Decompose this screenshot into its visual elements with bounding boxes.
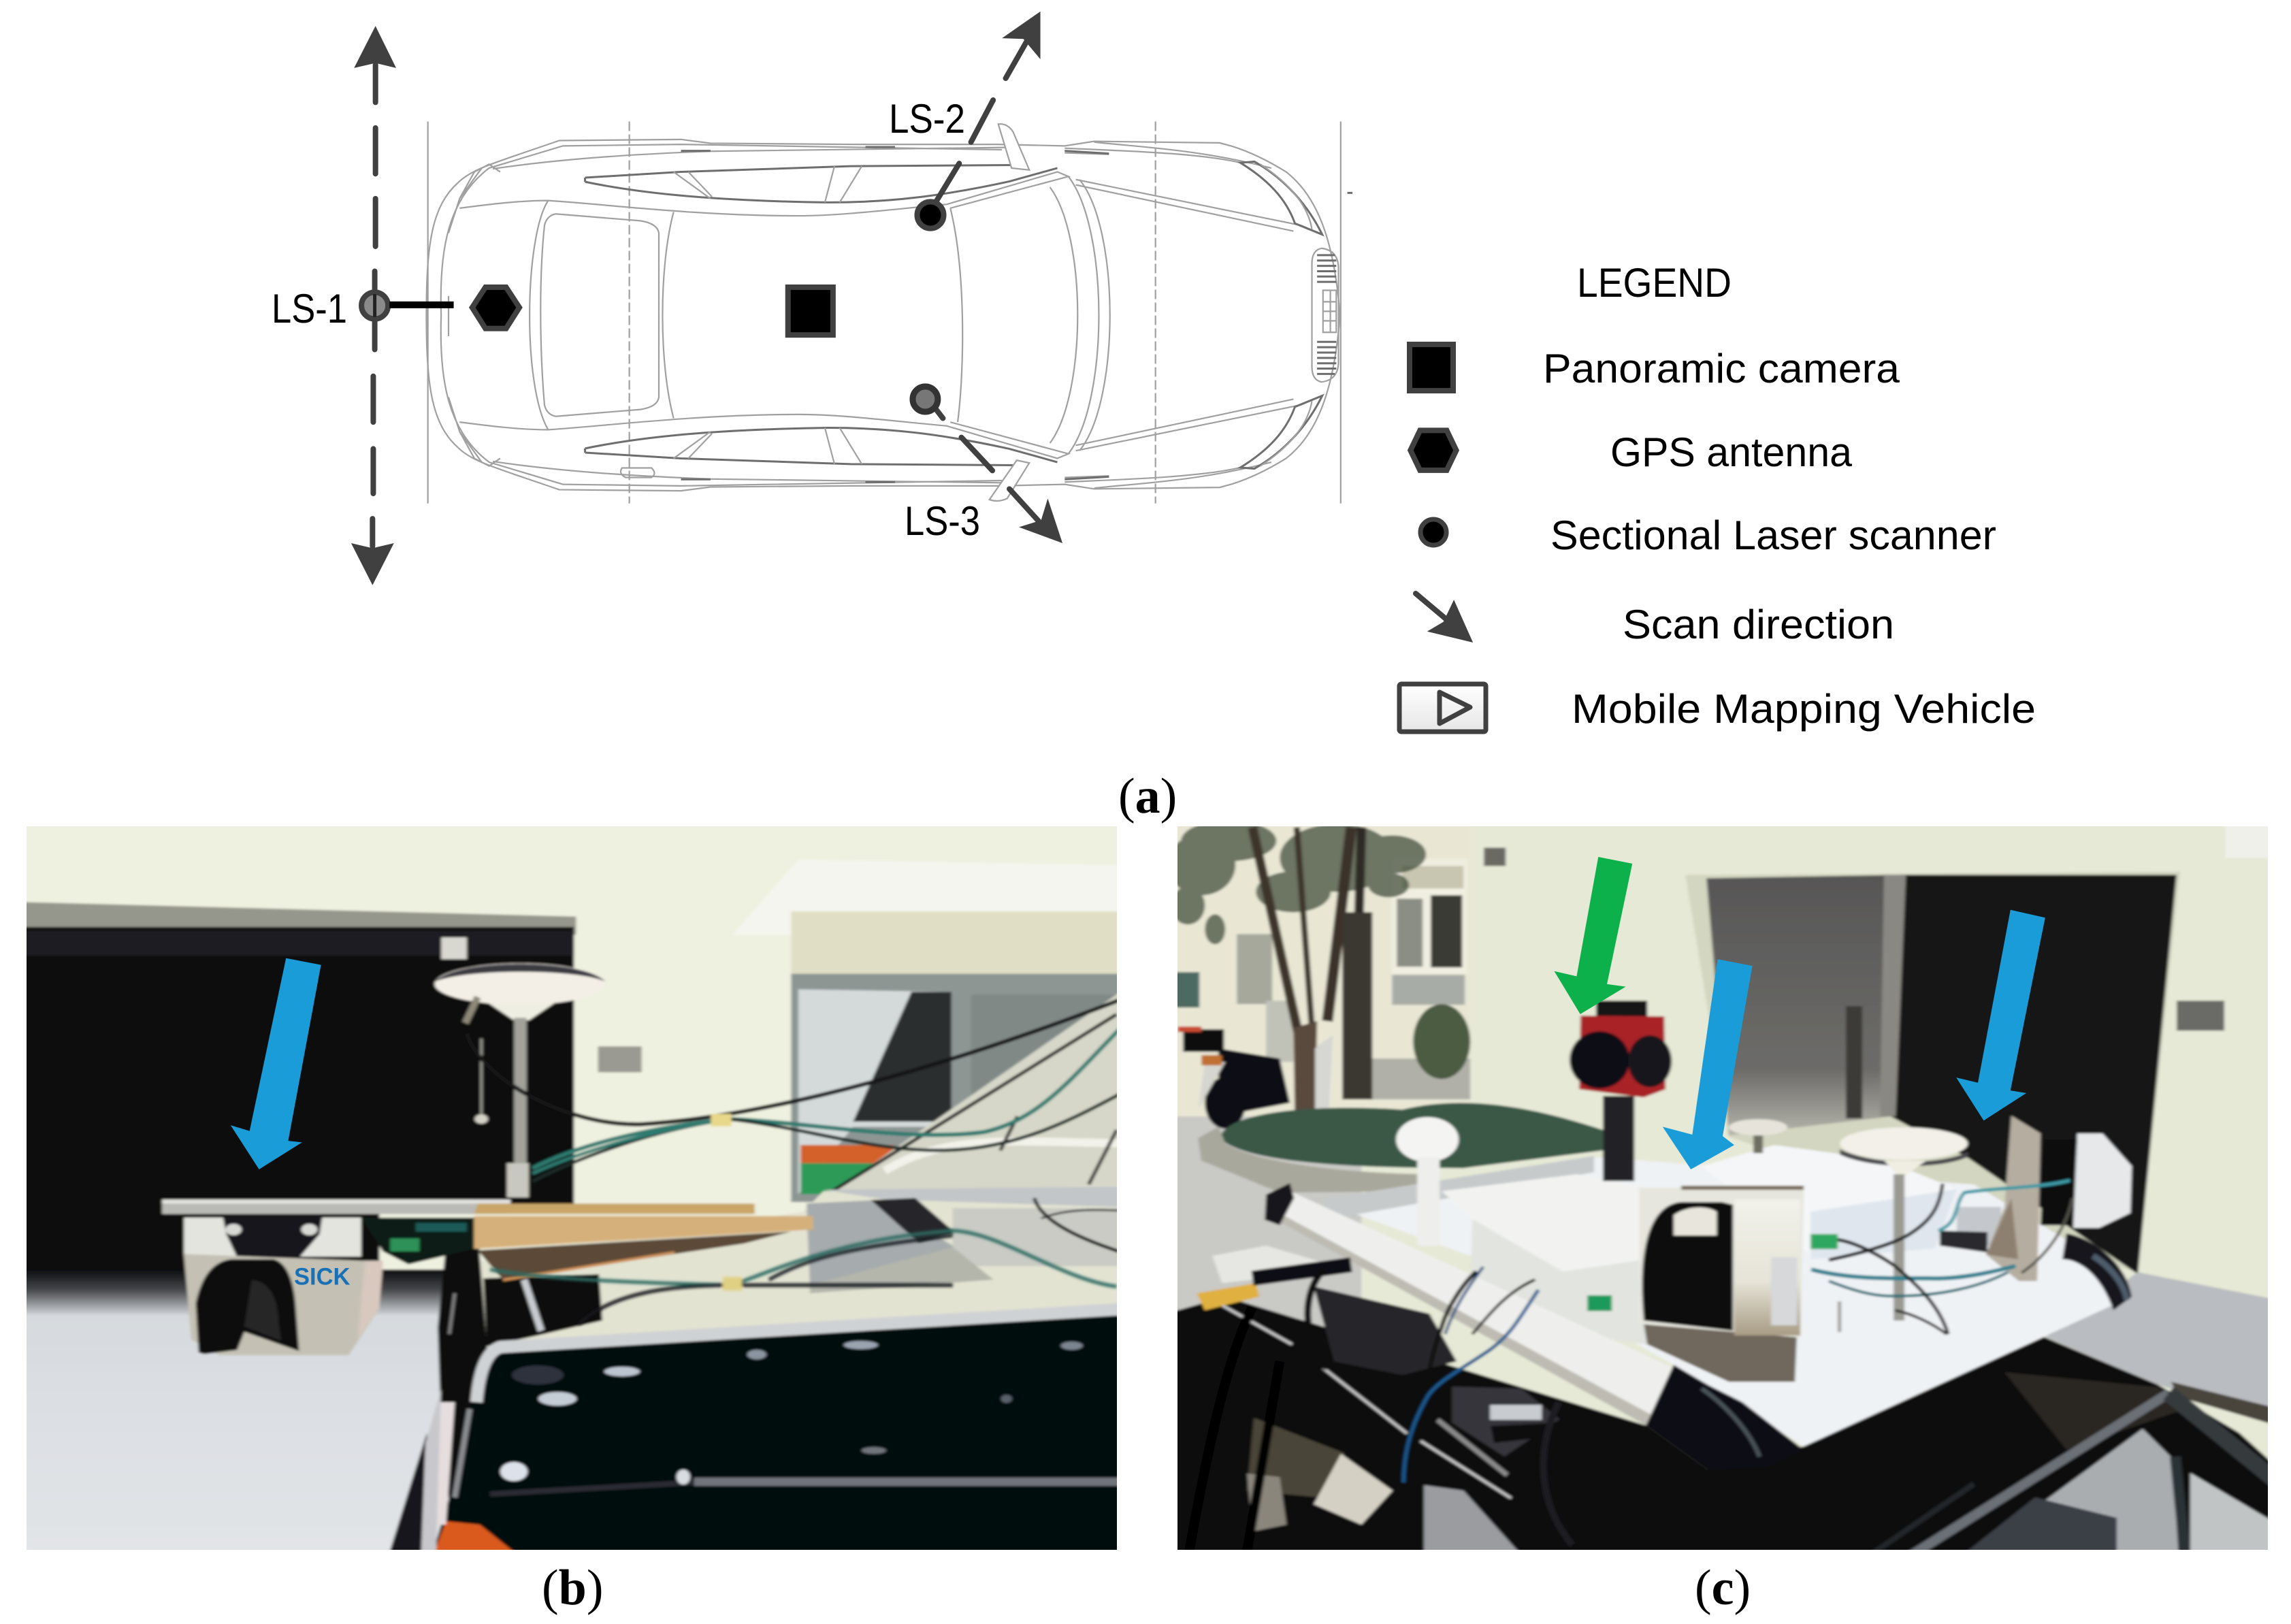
legend text: panoramic camera: Panoramic camera	[1543, 346, 1900, 391]
label LS-1: LS-1	[272, 286, 347, 331]
SICK logo text on scanner: SICK	[294, 1263, 351, 1290]
legend text: sectional laser scanner: Sectional Laser scanner	[1550, 513, 1996, 558]
blue arrow pointing to scanner	[231, 958, 321, 1169]
label LS-3: LS-3	[905, 498, 980, 544]
blue arrow pointing to centre scanner	[1663, 959, 1753, 1169]
sensor marker: LS-1 laser scanner	[361, 292, 454, 319]
scan direction arrow: LS-3	[928, 399, 1062, 543]
legend heading: LEGEND	[1577, 260, 1732, 306]
scan direction arrow: LS-1	[351, 26, 396, 585]
blue arrow pointing to right scanner	[1956, 910, 2045, 1120]
legend text: mobile mapping vehicle: Mobile Mapping Vehicle	[1572, 686, 2036, 732]
legend icon: mobile mapping vehicle	[1399, 684, 1486, 732]
caption (a): (a)	[1118, 768, 1177, 824]
panel b: photo of rear laser scanner and GPS antenna	[27, 826, 1117, 1550]
caption (b): (b)	[542, 1560, 603, 1616]
legend icon: scan direction arrow	[1416, 594, 1473, 643]
GPS antenna marker	[472, 287, 519, 329]
hood and windshield of the car (real-pixel coordinates)	[385, 967, 1157, 1624]
sensor marker: LS-3 laser scanner	[913, 387, 938, 412]
sensor marker: LS-2 laser scanner	[917, 201, 943, 229]
vehicle outline drawing	[426, 121, 1352, 504]
legend text: GPS antenna: GPS antenna	[1610, 429, 1853, 475]
green arrow pointing to panoramic camera	[1554, 857, 1632, 1014]
legend icon: sectional laser scanner	[1420, 519, 1446, 545]
legend	[1399, 260, 2036, 732]
legend icon: panoramic camera	[1410, 344, 1453, 391]
scan direction arrow: LS-2	[936, 12, 1041, 202]
panel a: vehicle top-view diagram	[272, 12, 1352, 585]
reflected cables on the hood	[490, 1231, 1117, 1324]
scene in real-pixel coordinates	[1089, 749, 2291, 1624]
legend icon: GPS antenna	[1410, 430, 1457, 470]
legend text: scan direction: Scan direction	[1623, 602, 1894, 647]
panoramic camera marker	[788, 287, 833, 335]
label LS-2: LS-2	[889, 96, 965, 142]
panel c: photo of sensor platform on car roof	[1177, 826, 2268, 1550]
caption (c): (c)	[1695, 1560, 1751, 1616]
